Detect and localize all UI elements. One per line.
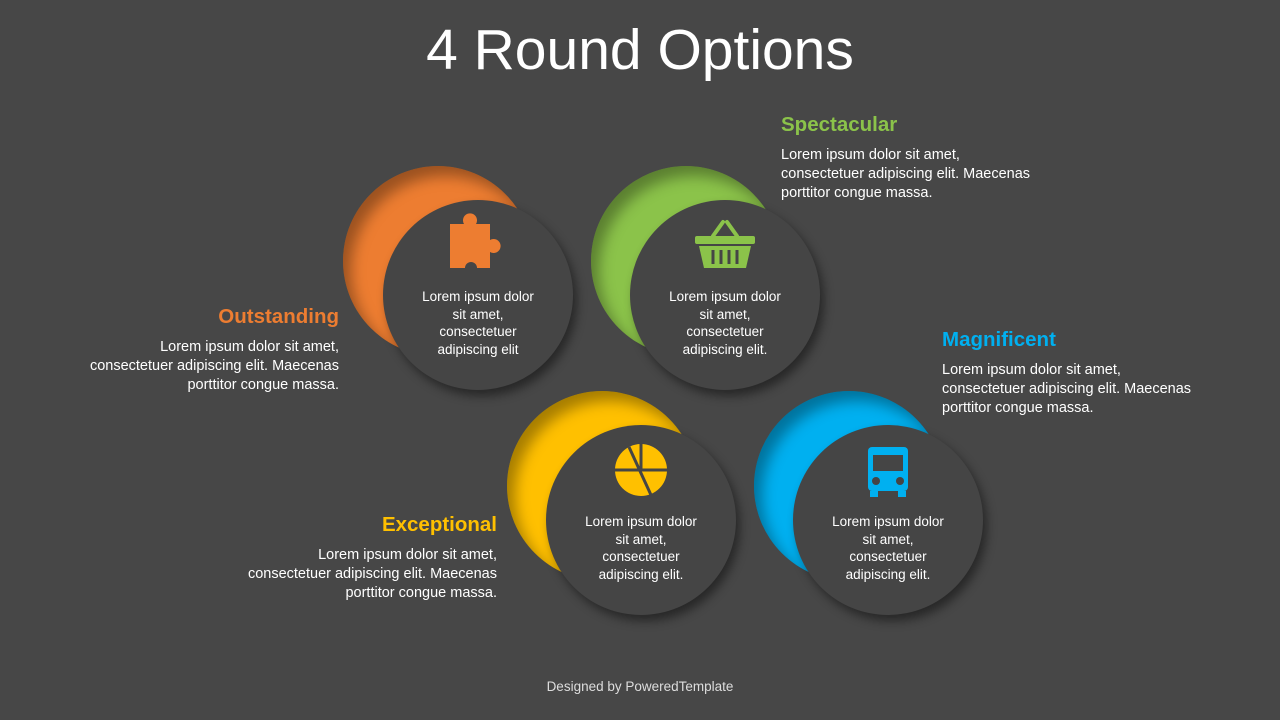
text: spectacular: consectetuer adipiscing elit. Maecenas (781, 166, 1030, 182)
icon: truck (868, 447, 908, 497)
dark circle magnificent: sit amet, (862, 532, 914, 546)
text: exceptional: Exceptional (382, 513, 497, 536)
dark circle exceptional: adipiscing elit. (599, 566, 683, 582)
text: outstanding: porttitor congue massa. (187, 377, 339, 393)
panel: spectacular circle (591, 166, 827, 399)
text: outstanding: Lorem ipsum dolor sit amet, (160, 339, 339, 355)
text: exceptional: porttitor congue massa. (345, 585, 497, 601)
text: magnificent: Lorem ipsum dolor sit amet, (942, 362, 1121, 378)
text: outstanding: consectetuer adipiscing elit. Maecenas (90, 358, 339, 374)
dark circle magnificent: consectetuer (849, 549, 927, 564)
dark circle spectacular: Lorem ipsum dolor (669, 289, 781, 304)
icon: basket (695, 220, 755, 268)
dark circle outstanding (383, 200, 573, 390)
panel: magnificent circle (754, 391, 990, 624)
panel: outstanding circle (343, 166, 580, 399)
text: magnificent: consectetuer adipiscing elit. Maecenas (942, 381, 1191, 397)
dark circle outstanding: Lorem ipsum dolor (422, 289, 534, 304)
text: magnificent: Magnificent (942, 328, 1056, 351)
icon: puzzle (450, 213, 501, 268)
panel: exceptional circle (507, 391, 743, 624)
dark circle magnificent (793, 425, 983, 615)
text: exceptional: consectetuer adipiscing elit. Maecenas (248, 566, 497, 582)
text: exceptional (248, 513, 497, 601)
footer: Designed by PoweredTemplate (547, 679, 733, 694)
text: spectacular: porttitor congue massa. (781, 185, 933, 201)
text: spectacular: Spectacular (781, 113, 897, 136)
dark circle spectacular: adipiscing elit. (683, 342, 767, 356)
dark circle magnificent: Lorem ipsum dolor (832, 514, 944, 529)
dark circle outstanding: consectetuer (439, 324, 517, 339)
icon: pie chart (615, 444, 667, 496)
dark circle outstanding: sit amet, (452, 306, 504, 322)
text: exceptional: Lorem ipsum dolor sit amet, (318, 547, 497, 563)
dark circle outstanding: adipiscing elit (437, 342, 519, 356)
dark circle spectacular (630, 200, 820, 390)
text: outstanding: Outstanding (218, 305, 339, 328)
dark circle exceptional: sit amet, (615, 532, 666, 546)
text: spectacular (781, 113, 1030, 201)
dark circle magnificent: adipiscing elit. (846, 566, 930, 582)
text: spectacular: Lorem ipsum dolor sit amet, (781, 147, 960, 163)
text: magnificent: porttitor congue massa. (942, 400, 1094, 416)
dark circle spectacular: consectetuer (686, 324, 764, 339)
dark circle exceptional (546, 425, 736, 615)
dark circle exceptional: Lorem ipsum dolor (585, 514, 697, 529)
text: outstanding (90, 305, 339, 393)
text: magnificent (942, 328, 1191, 416)
title: 4 Round Options (426, 18, 854, 82)
dark circle exceptional: consectetuer (602, 549, 680, 564)
dark circle spectacular: sit amet, (699, 306, 750, 322)
